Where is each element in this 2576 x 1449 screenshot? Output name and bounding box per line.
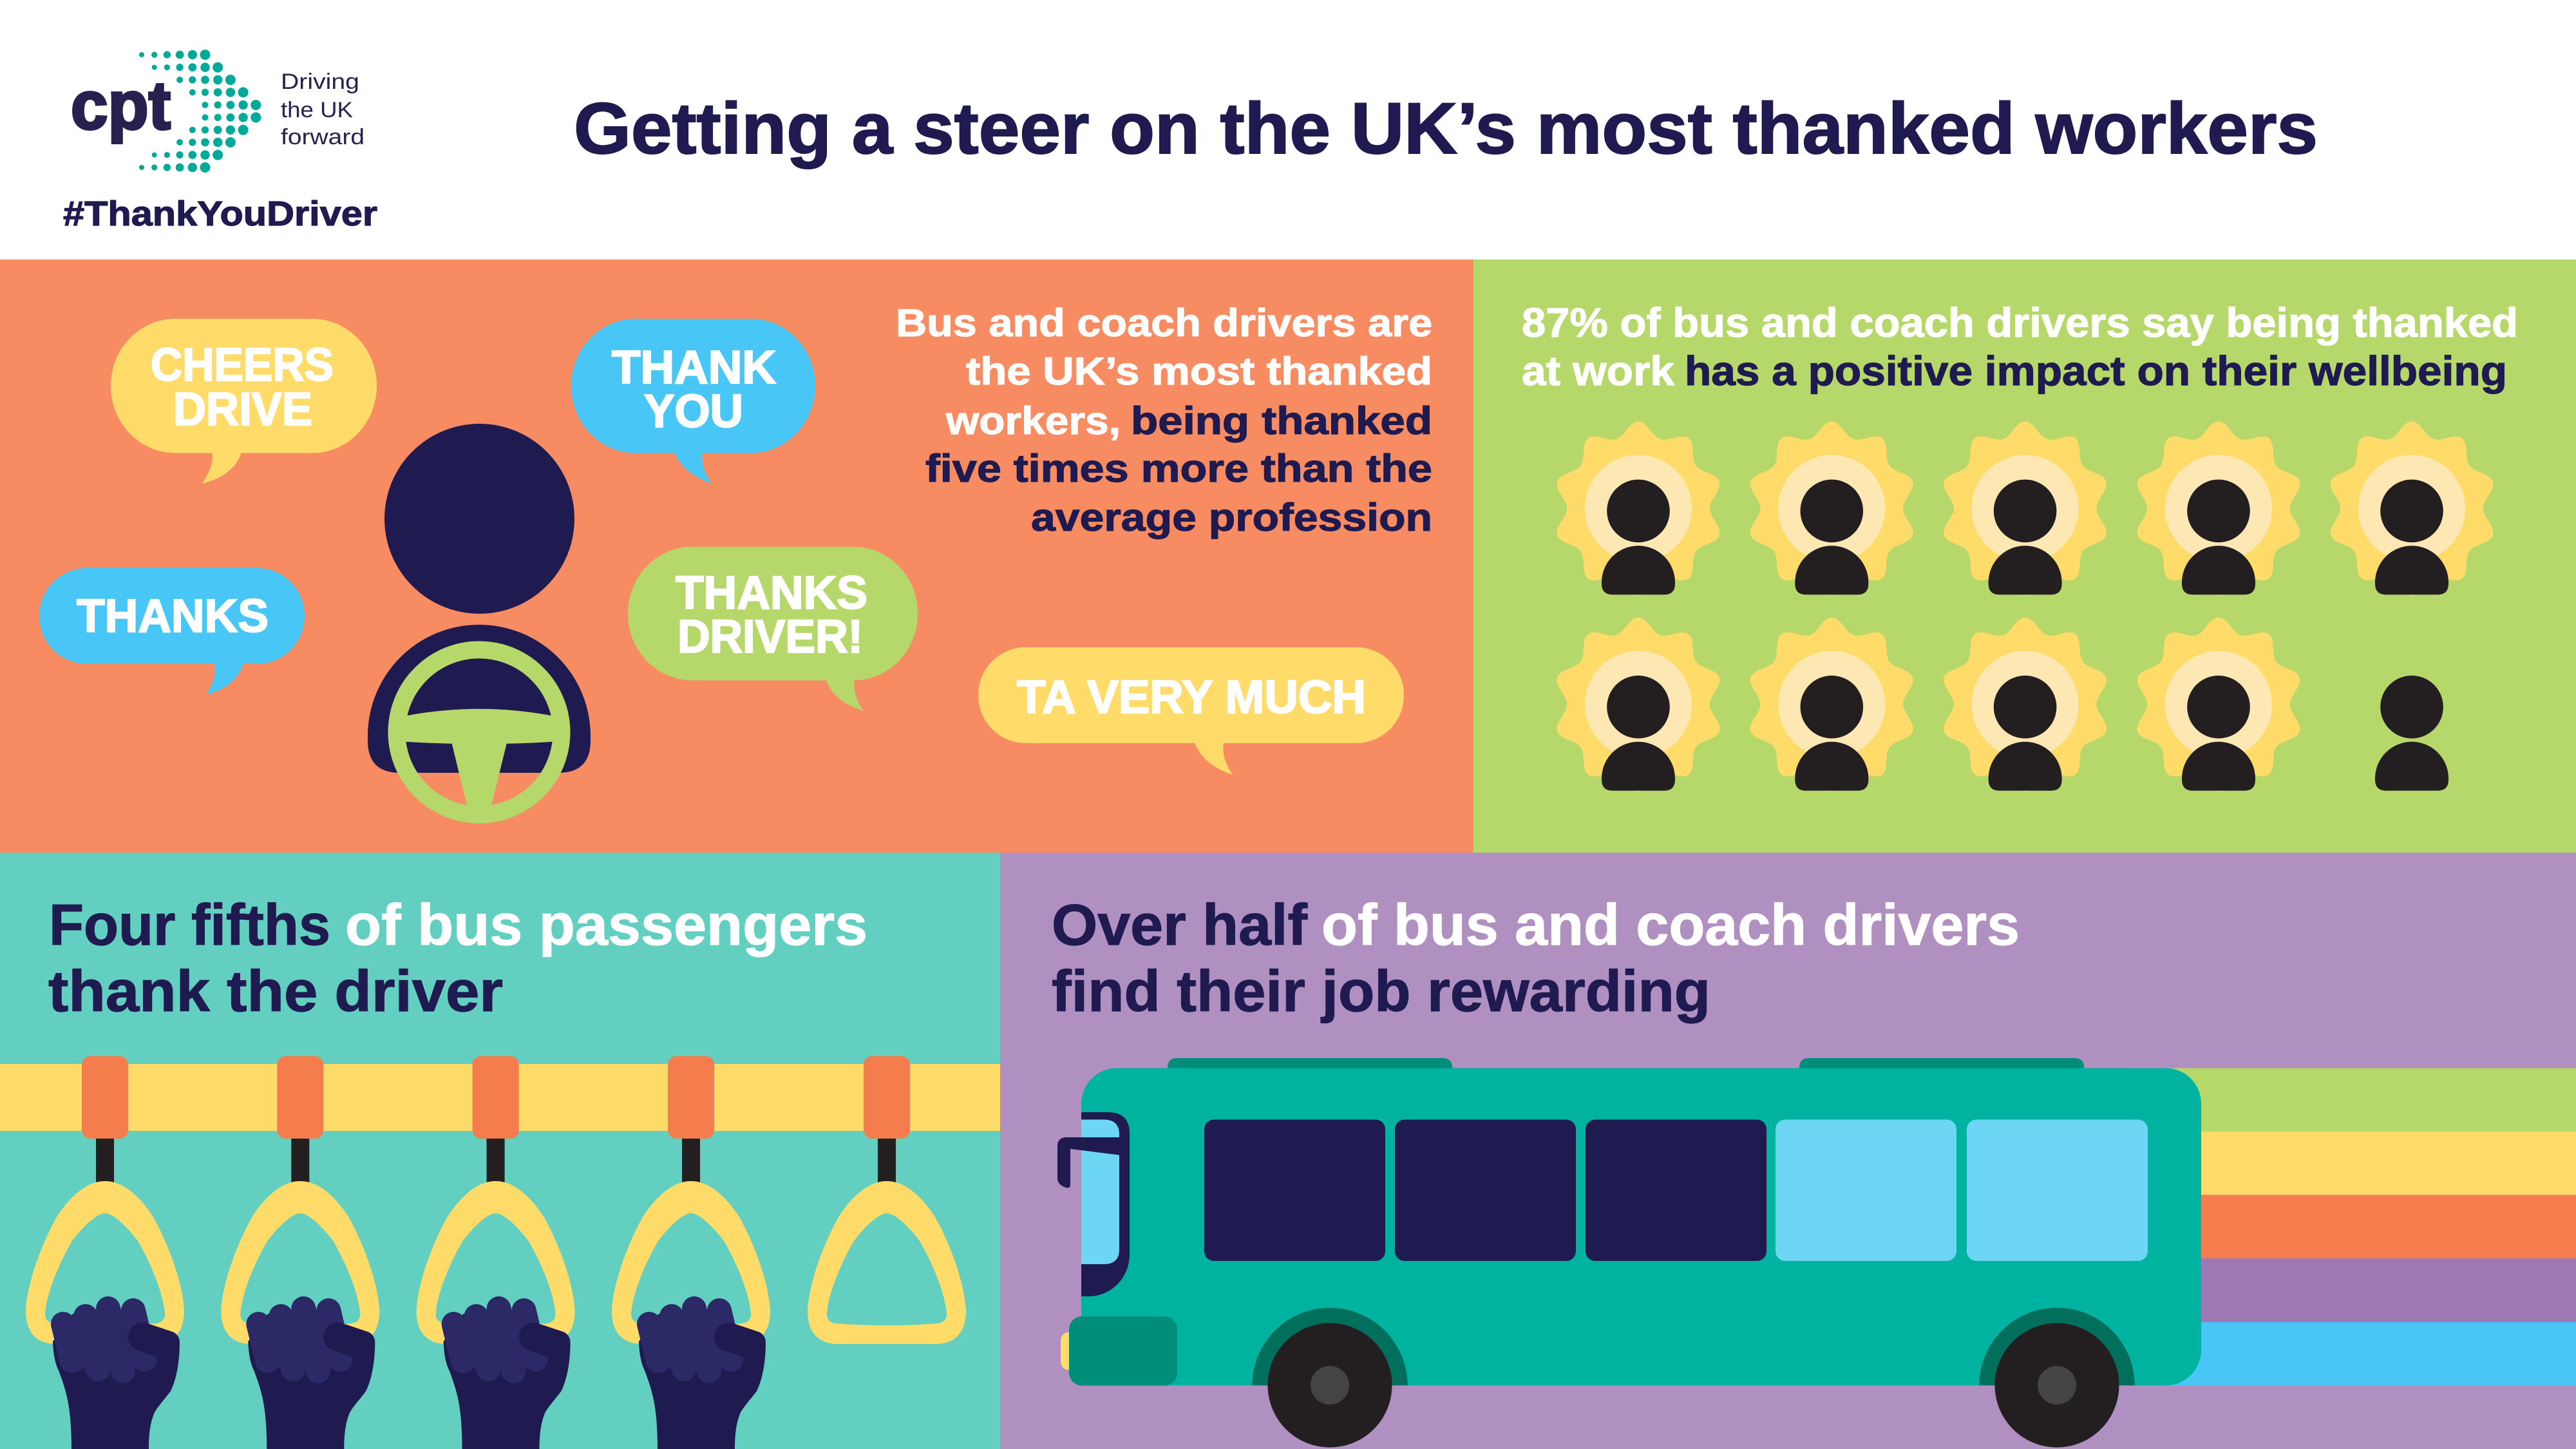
- speech bubble: thanks: THANKS: [77, 591, 269, 642]
- panel: passengers: [0, 853, 1000, 1449]
- text block: 87% of drivers: has a positive impact on their wellbeing: [1685, 348, 2507, 394]
- logo wordmark: cpt: [71, 68, 171, 144]
- title: Getting a steer on the UK’s most thanked workers: [574, 88, 2318, 169]
- speech bubble: ta very much: [978, 647, 1404, 775]
- hashtag: #ThankYouDriver: [63, 194, 377, 233]
- heading: four fifths: of bus passengers: [345, 893, 867, 958]
- speech bubble: cheers drive: [111, 319, 377, 484]
- handle with hand 1: [26, 1056, 184, 1449]
- text block: most thanked: the UK’s most thanked: [966, 350, 1432, 393]
- logo strapline: forward: [281, 125, 365, 149]
- panel: most thanked workers: [0, 260, 1473, 853]
- logo strapline: Driving: [281, 70, 359, 94]
- text block: 87% of drivers: 87% of bus and coach drivers say being thanked: [1522, 299, 2518, 346]
- handle with hand 3: [417, 1056, 575, 1449]
- text block: 87% of drivers: at work: [1522, 348, 1674, 394]
- speech bubble: thanks driver: THANKS: [676, 567, 867, 619]
- heading: over half: Over half: [1052, 893, 1308, 958]
- icon: driver with steering wheel: [368, 424, 591, 815]
- speech bubble: cheers drive: DRIVE: [173, 384, 312, 435]
- speech bubble: thanks: [39, 568, 305, 695]
- logo dot arrow: [139, 50, 261, 173]
- heading: over half: find their job rewarding: [1052, 960, 1710, 1024]
- logo strapline: [281, 70, 365, 149]
- text block: most thanked: Bus and coach drivers are: [896, 301, 1432, 345]
- pictogram: 9 of 10 people highlighted: [1557, 421, 2493, 791]
- logo strapline: the UK: [281, 98, 353, 122]
- heading: four fifths: [48, 893, 867, 1024]
- handle with hand 4: [612, 1056, 770, 1449]
- speech bubble: ta very much: TA VERY MUCH: [1017, 672, 1366, 723]
- logo: cpt: [71, 50, 365, 173]
- speech bubble: thanks driver: DRIVER!: [677, 611, 863, 663]
- bus illustration: [1057, 1058, 2201, 1448]
- panel: rewarding job: [1000, 853, 2576, 1449]
- handle with hand 2: [221, 1056, 379, 1449]
- speech bubble: thank you: [571, 319, 815, 484]
- heading: over half: of bus and coach drivers: [1321, 893, 2020, 958]
- header background: [0, 0, 2576, 260]
- text block: 87% of drivers: [1522, 299, 2518, 394]
- text block: most thanked: workers,: [945, 399, 1121, 442]
- grab rail: [0, 1064, 1000, 1131]
- text block: most thanked: [896, 301, 1432, 539]
- speech bubble: thanks driver: [628, 547, 918, 711]
- panel: wellbeing: [1473, 260, 2576, 853]
- speech bubble: cheers drive: CHEERS: [151, 339, 334, 391]
- text block: most thanked: five times more than the: [925, 447, 1432, 490]
- heading: four fifths: Four fifths: [49, 893, 330, 958]
- rainbow stripes: [2125, 1068, 2576, 1385]
- speech bubble: thank you: THANK: [612, 342, 776, 393]
- speech bubble: thank you: YOU: [644, 386, 743, 437]
- empty handle: [808, 1056, 966, 1344]
- heading: four fifths: thank the driver: [48, 960, 503, 1024]
- text block: most thanked: average profession: [1031, 496, 1432, 539]
- text block: most thanked: being thanked: [1131, 399, 1432, 442]
- heading: over half: [1052, 893, 2020, 1024]
